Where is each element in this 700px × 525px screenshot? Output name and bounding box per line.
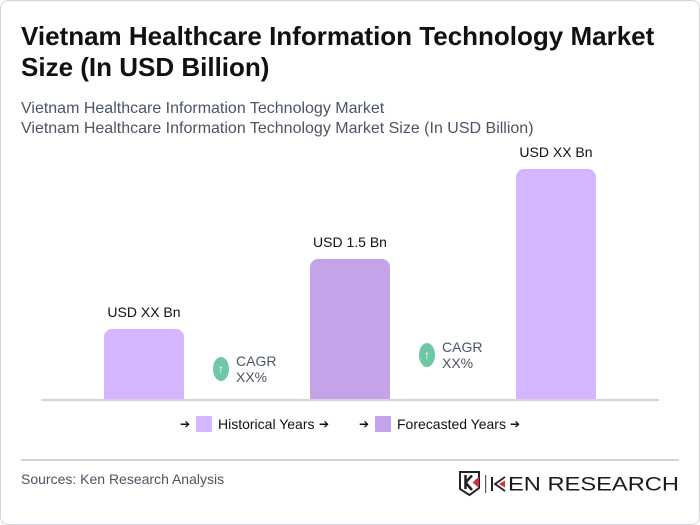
logo: Ken Research [459, 471, 679, 496]
CAGR text: XX% [236, 369, 267, 385]
legend [180, 416, 520, 432]
subtitle [21, 100, 534, 137]
legend swatch: historical [196, 416, 212, 432]
axis line [41, 399, 659, 401]
bar 2 label: USD 1.5 Bn [313, 234, 387, 250]
legend arrow: ➔ [510, 417, 520, 431]
title: Size (In USD Billion) [21, 52, 269, 82]
bar 1 label: USD XX Bn [107, 304, 181, 320]
subtitle: Vietnam Healthcare Information Technology Market [21, 100, 384, 117]
footer divider [21, 459, 679, 461]
title [21, 21, 654, 82]
bar 3 label: USD XX Bn [519, 144, 593, 160]
subtitle: Vietnam Healthcare Information Technology Market Size (In USD Billion) [21, 120, 534, 137]
bar chart [41, 144, 659, 401]
legend label: forecasted: Forecasted Years [397, 416, 506, 432]
CAGR text: CAGR [236, 353, 276, 369]
icon: up arrow [419, 343, 435, 367]
title: Vietnam Healthcare Information Technology Market [21, 21, 654, 51]
CAGR text: XX% [442, 355, 473, 371]
CAGR text [236, 353, 276, 385]
logo K mark [492, 477, 505, 491]
bar 2: forecast [310, 259, 390, 400]
CAGR badge 1 [213, 353, 276, 385]
logo wordmark: EN RESEARCH [508, 474, 679, 496]
legend arrow: ➔ [180, 417, 190, 431]
logo shield mark [460, 472, 479, 495]
bar 1: historical [104, 329, 184, 400]
legend swatch: forecasted [375, 416, 391, 432]
icon: up arrow: ↑ [424, 348, 430, 362]
legend label: historical: Historical Years [218, 416, 314, 432]
CAGR text: CAGR [442, 339, 482, 355]
legend arrow: ➔ [319, 417, 329, 431]
CAGR badge 2 [419, 339, 482, 371]
CAGR text [442, 339, 482, 371]
icon: up arrow [213, 357, 229, 381]
bar 3: forecast [516, 169, 596, 400]
legend arrow: ➔ [359, 417, 369, 431]
icon: up arrow: ↑ [218, 362, 224, 376]
sources text: Sources: Ken Research Analysis [21, 471, 224, 487]
logo separator [485, 475, 486, 493]
